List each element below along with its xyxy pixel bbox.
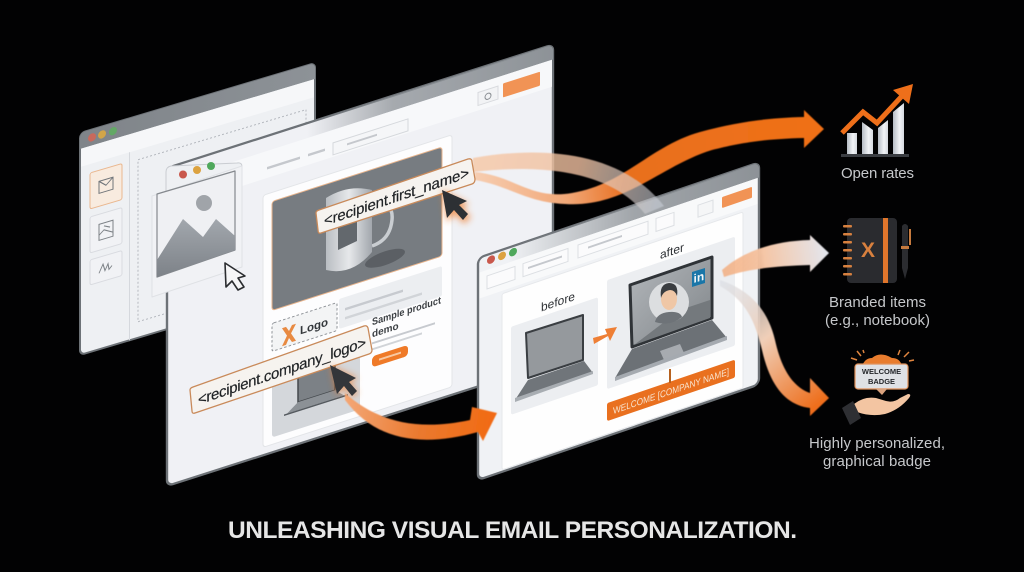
panel: email template card: [263, 135, 452, 447]
label: branded items: (e.g., notebook): [825, 312, 930, 329]
panel: before/after result window: [478, 162, 759, 480]
icon: image sidebar button: [90, 207, 122, 253]
after panel: after: [660, 240, 684, 262]
icon: welcome badge on hand: WELCOME: [862, 367, 901, 376]
panel: image picker floating window: [152, 162, 242, 297]
sample product text: demo: [372, 321, 399, 340]
hero product image with mug: [272, 147, 442, 310]
orange action button: [503, 72, 540, 97]
arrow: first name to open rates: [475, 110, 824, 204]
before panel: [511, 282, 598, 415]
laptop: after with profile: [615, 257, 727, 383]
arrow: logo to result window: [345, 393, 497, 441]
icon: mail sidebar button: [90, 163, 122, 209]
result card: [502, 212, 743, 470]
toolbar controls: [487, 199, 713, 289]
panel: main email editor window: [167, 44, 553, 486]
toolbar search dropdown: [267, 119, 408, 176]
icon: black cursor with glow: [442, 190, 471, 224]
arrow: to branded items: [722, 235, 829, 277]
icon: welcome badge on hand: BADGE: [868, 377, 895, 386]
arrow: before to after: [593, 327, 617, 344]
arrow: to welcome badge: [720, 280, 829, 416]
arrow: first name to result window: [473, 152, 664, 214]
sample product text: [372, 295, 442, 350]
orange action button: [722, 187, 752, 208]
icon: linkedin badge: in: [694, 269, 704, 286]
logo placeholder: Logo: [300, 316, 328, 337]
laptop: before: [515, 315, 593, 402]
label: highly personalized graphical badge: [809, 435, 945, 470]
tag: recipient company logo: <recipient.company_logo>: [198, 334, 366, 409]
welcome banner: WELCOME [COMPANY NAME]: [613, 367, 729, 417]
icon: picture placeholder: [157, 171, 235, 277]
panel: left editor window: [80, 63, 315, 355]
title: UNLEASHING VISUAL EMAIL PERSONALIZATION.: [228, 517, 797, 544]
label: branded items: Branded items: [829, 294, 926, 311]
laptop thumbnail panel: [272, 332, 360, 437]
sample product text: Sample product: [372, 295, 442, 328]
icon: welcome badge on hand: [842, 350, 914, 425]
icon: black cursor on logo tag: [330, 365, 358, 398]
after panel: [607, 223, 735, 389]
before panel: before: [541, 289, 575, 314]
logo placeholder: [272, 303, 337, 351]
label: branded items: [825, 294, 930, 329]
icon: white cursor: [225, 263, 245, 290]
label: highly personalized graphical badge: Highly personalized,: [809, 435, 945, 452]
icon: growth chart: [841, 84, 913, 157]
tag: recipient first name: <recipient.first_name>: [324, 165, 469, 230]
mug: [326, 188, 392, 271]
power button: [478, 86, 498, 105]
label: open rates: Open rates: [841, 165, 914, 182]
small orange CTA: [372, 345, 408, 367]
label: highly personalized graphical badge: graphical badge: [823, 453, 931, 470]
icon: branded notebook: X: [861, 239, 875, 262]
icon: signature sidebar button: [90, 250, 122, 285]
icon: branded notebook: [843, 218, 911, 283]
